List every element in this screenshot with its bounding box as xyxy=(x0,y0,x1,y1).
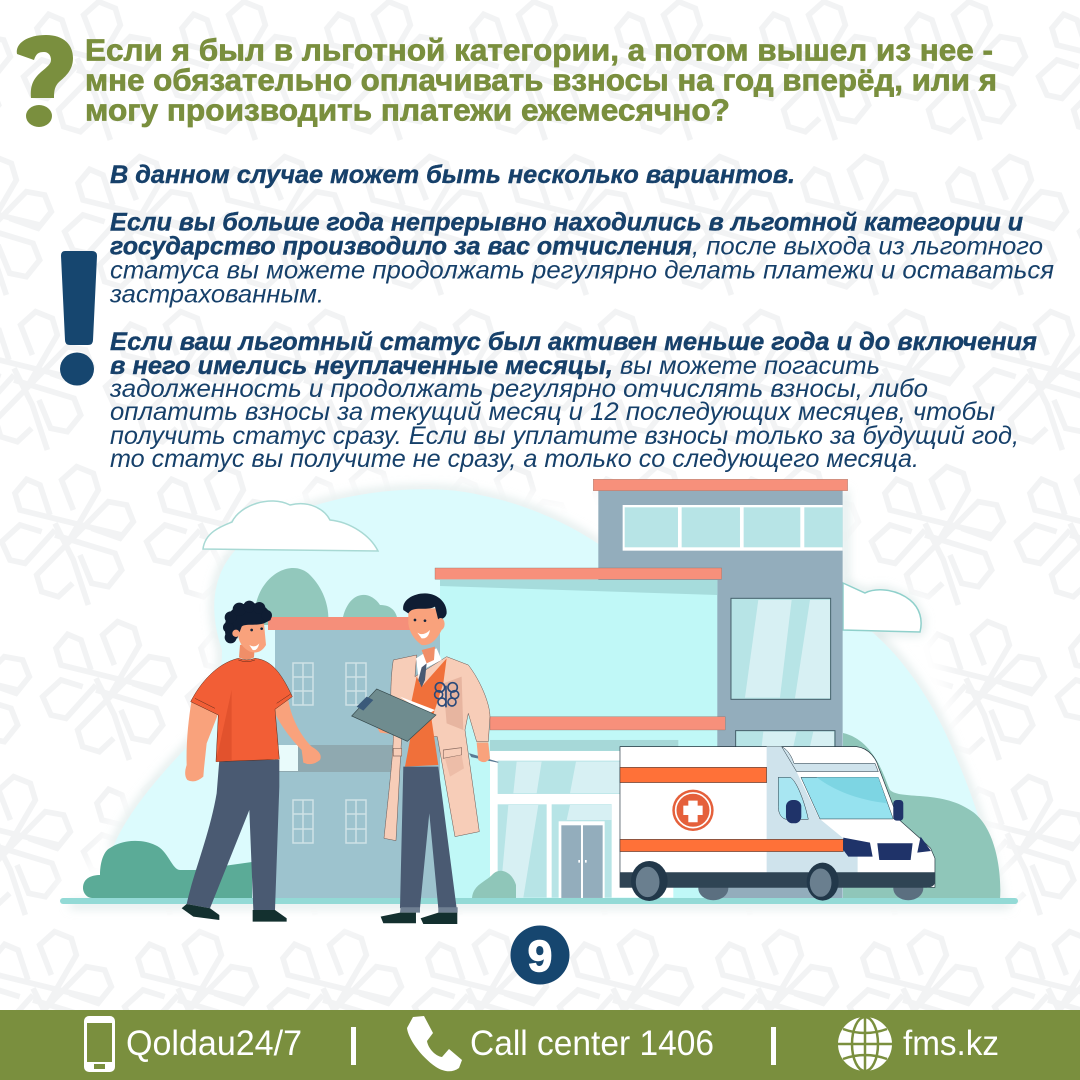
body text: оплатить взносы за текущий месяц и 12 последующих месяцев, чтобы xyxy=(110,398,995,426)
body text: в него имелись неуплаченные месяцы, xyxy=(110,352,613,380)
body text: Если вы больше года непрерывно находились в льготной категории и xyxy=(110,208,1023,236)
person: patient xyxy=(182,601,321,922)
body text: статуса вы можете продолжать регулярно делать платежи и оставаться xyxy=(110,256,1054,284)
body text: то статус вы получите не сразу, а только со следующего месяца. xyxy=(110,445,919,473)
separator xyxy=(771,1027,776,1065)
icon: smartphone xyxy=(84,1016,115,1072)
heading xyxy=(85,32,997,128)
body text: задолженность и продолжать регулярно отчислять взносы, либо xyxy=(109,375,928,403)
body text: Если ваш льготный статус был активен меньше года и до включения xyxy=(110,328,1037,356)
label: Qoldau: Qoldau24/7 xyxy=(126,1024,302,1063)
body text: застрахованным. xyxy=(109,280,324,308)
footer bar xyxy=(0,1010,1080,1080)
body text: государство производило за вас отчисления xyxy=(110,232,692,260)
bush left xyxy=(83,841,252,898)
bush right xyxy=(843,733,1000,900)
cloud right xyxy=(843,583,921,632)
body text: , после выхода из льготного xyxy=(692,232,1043,260)
building left xyxy=(268,617,440,898)
label: call center: Call center 1406 xyxy=(470,1024,714,1063)
heading: мне обязательно оплачивать взносы на год вперёд, или я xyxy=(85,62,997,98)
person: doctor xyxy=(352,593,498,924)
building right complex xyxy=(435,479,848,900)
heading: Если я был в льготной категории, а потом вышел из нее - xyxy=(85,32,993,68)
label: website: fms.kz xyxy=(903,1024,999,1063)
separator xyxy=(351,1027,356,1065)
icon: exclamation mark xyxy=(60,251,97,386)
icon: handset xyxy=(407,1016,462,1071)
illustration: clinic scene xyxy=(60,479,1018,924)
icon: question mark xyxy=(17,35,73,127)
body text: В данном случае может быть несколько вариантов. xyxy=(110,161,795,189)
icon: globe xyxy=(838,1017,892,1071)
ground xyxy=(60,898,1018,904)
page number badge: 9 xyxy=(528,932,552,981)
body text: получить статус сразу. Если вы уплатите взносы только за будущий год, xyxy=(110,422,1019,450)
small bush xyxy=(472,871,516,898)
heading: могу производить платежи ежемесячно? xyxy=(85,92,730,128)
white glow behind scene xyxy=(75,489,1005,910)
cloud left xyxy=(203,501,378,551)
sky blob xyxy=(105,489,1000,900)
ambulance xyxy=(620,747,935,901)
body text xyxy=(109,161,1054,473)
page number badge xyxy=(510,926,570,984)
trees xyxy=(255,568,397,625)
soft shadow behind scene xyxy=(70,489,1010,905)
body text: вы можете погасить xyxy=(620,352,880,380)
